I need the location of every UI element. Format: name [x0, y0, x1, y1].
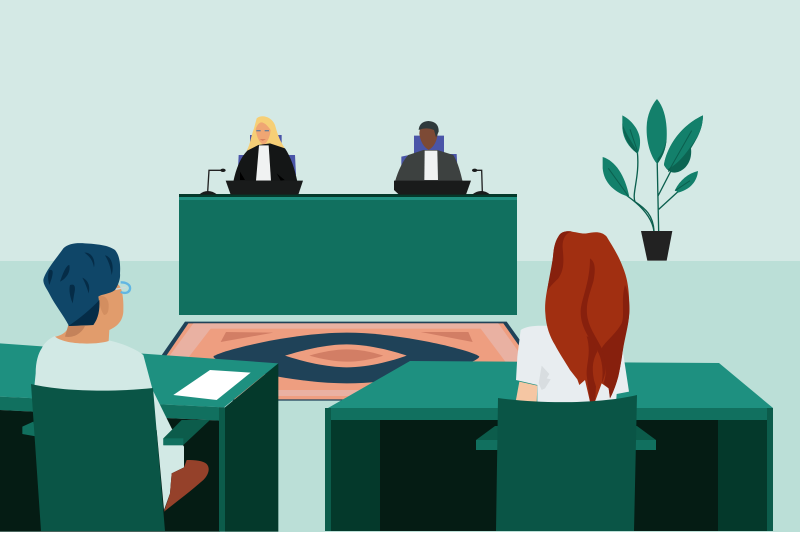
desk shelf [163, 420, 210, 445]
figure: right judge [394, 121, 471, 195]
chair: right [496, 395, 637, 531]
panel: right desk [325, 361, 773, 531]
hair [43, 243, 120, 326]
document on desk [173, 370, 251, 400]
glasses [115, 282, 130, 293]
panel: carpet [130, 322, 563, 401]
neck and face [55, 283, 123, 344]
icon: potted plant [603, 99, 703, 261]
leg [164, 460, 209, 512]
chair: left [31, 384, 165, 531]
icon: left microphone [199, 169, 226, 195]
shirt [33, 336, 184, 510]
panel: left desk [0, 343, 278, 532]
shelf front [163, 438, 183, 445]
figure: woman with red hair [515, 231, 629, 403]
figure: left judge [226, 116, 303, 195]
icon: right microphone [472, 169, 490, 195]
figure: man with blue hair [33, 243, 210, 512]
panel: judges' bench [179, 194, 517, 315]
